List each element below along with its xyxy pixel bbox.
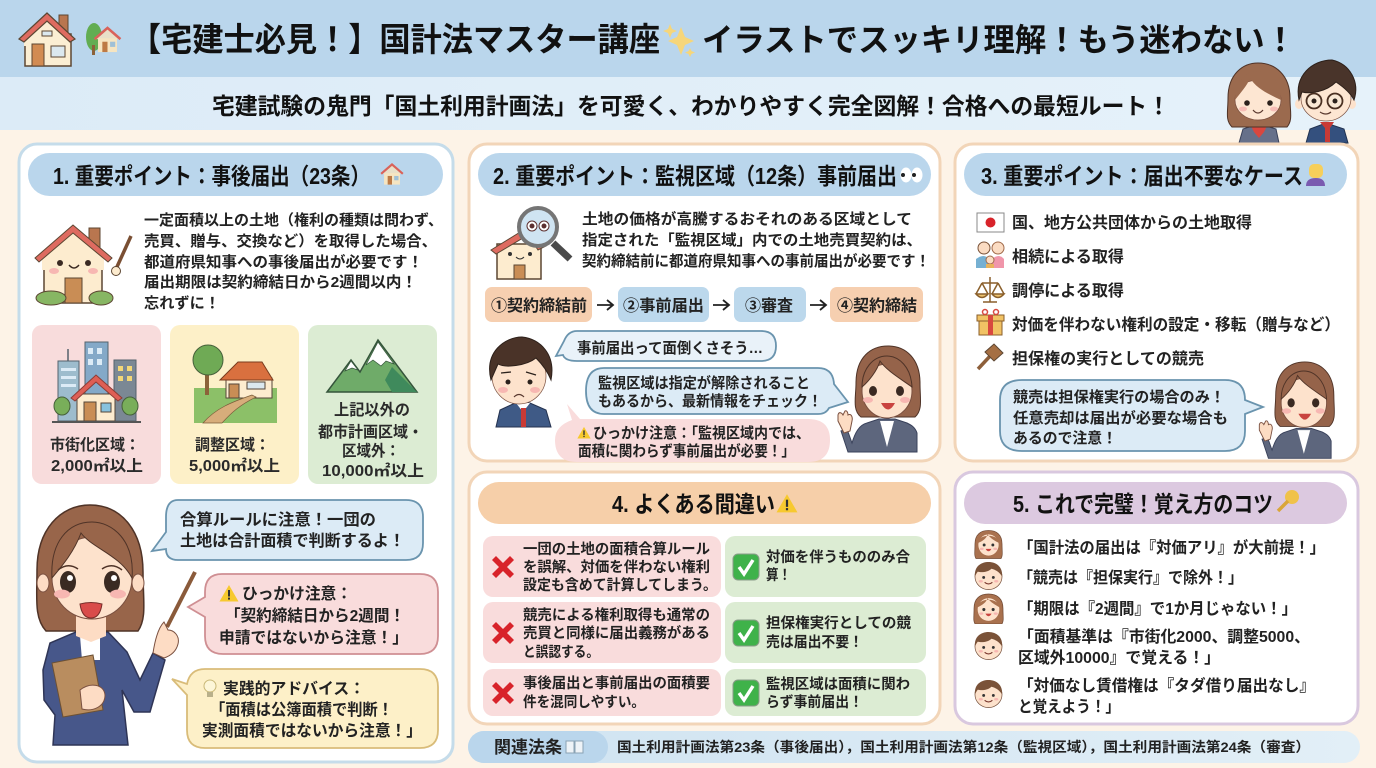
step 3: ③審査	[745, 297, 793, 315]
mistake row 3: 事後届出と事前届出の面積要	[523, 674, 710, 692]
heading 3: 3. 重要ポイント：届出不要なケース	[981, 163, 1303, 189]
character: teacher with pointer	[37, 505, 195, 745]
callout: 合算ルール: 合算ルールに注意！一団の	[180, 510, 376, 529]
callout: 実践的アドバイス	[172, 669, 438, 748]
text: intro	[144, 211, 443, 312]
icon: family	[976, 242, 1004, 268]
callout: 面倒くさそう	[556, 331, 776, 361]
callout: 監視区域 ひっかけ注意: ひっかけ注意：「監視区域内では、	[593, 424, 810, 442]
label: 都市計画区域・	[318, 422, 423, 441]
arrow 2	[713, 300, 729, 310]
tip 1	[975, 530, 1325, 558]
suit	[43, 632, 165, 745]
arrow 1	[597, 300, 613, 310]
tip 4: 「面積基準は『市街化2000、調整5000、	[1018, 627, 1310, 646]
list item: 対価なし	[977, 310, 1340, 335]
icon: city	[52, 342, 141, 423]
mistake row 1: を誤解、対価を伴わない権利	[523, 558, 710, 576]
heading 1: 1. 重要ポイント：事後届出（23条）	[53, 163, 370, 189]
card: 区域外	[308, 325, 437, 484]
step 1	[485, 287, 592, 322]
correction row 3	[725, 669, 926, 716]
heading 5: 5. これで完璧！覚え方のコツ	[1013, 491, 1273, 517]
icon: light bulb	[204, 680, 216, 697]
character: teacher	[1259, 362, 1334, 458]
label: 5,000㎡以上	[189, 456, 280, 475]
label: 調整区域：	[195, 436, 270, 454]
footer label	[468, 731, 608, 763]
tip 4: 区域外10000』で覚える！」	[1018, 648, 1220, 667]
hand	[153, 622, 178, 658]
correction row 1: 算！	[766, 566, 791, 584]
icon: countryside	[193, 345, 277, 423]
callout: ひっかけ注意: 「契約締結日から2週間！	[225, 606, 405, 625]
subtitle banner: 宅建試験の鬼門「国土利用計画法」を可愛く、わかりやすく完全図解！合格への最短ルート！	[212, 93, 1170, 119]
icon: sparkles	[663, 24, 695, 57]
step 4: ④契約締結	[837, 296, 917, 315]
callout: 競売 注意	[1000, 380, 1263, 451]
panel 3: 届出不要なケース	[955, 144, 1358, 461]
step 2	[618, 287, 709, 322]
callout: 最新情報: 監視区域は指定が解除されること	[598, 374, 810, 392]
tip 3	[974, 594, 1297, 624]
text: intro: 忘れずに！	[144, 295, 220, 312]
correction row 3: らず事前届出！	[766, 693, 863, 711]
character: worried boy	[490, 337, 552, 427]
text: intro	[582, 210, 930, 270]
heading 3	[964, 153, 1347, 196]
heading 2: 2. 重要ポイント：監視区域（12条）事前届出	[493, 163, 897, 189]
title banner	[0, 0, 1376, 77]
label: 10,000㎡以上	[322, 461, 424, 480]
list item: 国: 国、地方公共団体からの土地取得	[1012, 213, 1252, 232]
icon: mountains	[327, 340, 417, 392]
heading 4	[478, 482, 931, 524]
callout: 最新情報: もあるから、最新情報をチェック！	[598, 392, 822, 410]
icon: eyes	[900, 168, 922, 182]
characters: student girl	[1227, 63, 1291, 143]
label	[189, 436, 280, 475]
title text	[130, 21, 1296, 58]
list item: 競売	[978, 344, 1204, 369]
list item: 競売: 担保権の実行としての競売	[1012, 349, 1204, 368]
step 1: ①契約締結前	[491, 296, 587, 315]
heading 1	[28, 153, 443, 196]
icon: scales	[976, 277, 1004, 302]
mistake row 2	[483, 602, 721, 663]
flow chart	[485, 287, 923, 322]
footer text: 国土利用計画法第23条（事後届出），国土利用計画法第12条（監視区域），国土利用計画法第24条（審査）	[617, 739, 1310, 755]
tip 5: 「対価なし賃借権は『タダ借り届出なし』	[1018, 676, 1315, 695]
callout: 実践的アドバイス: 「面積は公簿面積で判断！	[210, 701, 393, 719]
list item: 調停: 調停による取得	[1012, 282, 1124, 300]
mistake row 1	[483, 536, 721, 597]
callout: 面倒くさそう: 事前届出って面倒くさそう…	[577, 339, 763, 357]
callout: 競売 注意: あるので注意！	[1013, 429, 1117, 447]
label: 2,000㎡以上	[51, 456, 143, 475]
heading 5	[964, 482, 1347, 524]
list item: 対価なし: 対価を伴わない権利の設定・移転（贈与など）	[1012, 315, 1340, 334]
icon: small house with tree	[86, 23, 120, 55]
callout: ひっかけ注意: ひっかけ注意：	[242, 585, 352, 603]
step 2: ②事前届出	[623, 296, 704, 315]
icon: key	[1278, 490, 1299, 511]
callout: 合算ルール	[152, 500, 423, 560]
panel 2: 監視区域	[469, 144, 940, 462]
folder	[52, 655, 103, 717]
tip 5	[975, 676, 1315, 716]
correction row 3: 監視区域は面積に関わ	[766, 675, 910, 693]
mistake row 2: と誤認する。	[523, 644, 599, 661]
tip 2: 「競売は『担保実行』で除外！」	[1018, 568, 1243, 587]
callout: 競売 注意: 任意売却は届出が必要な場合も	[1013, 409, 1228, 427]
tip 2	[975, 562, 1243, 590]
callout: ひっかけ注意	[188, 574, 438, 654]
correction row 2	[725, 602, 926, 663]
heading 4: 4. よくある間違い	[612, 491, 775, 517]
label	[50, 435, 143, 475]
callout: 最新情報	[586, 368, 848, 414]
title text: 【宅建士必見！】国計法マスター講座	[130, 21, 660, 58]
mistake row 3: 件を混同しやすい。	[523, 694, 645, 711]
text: intro: 都道府県知事への事後届出が必要です！	[144, 253, 423, 271]
icon: book	[566, 741, 583, 753]
tip 1: 「国計法の届出は『対価アリ』が大前提！」	[1018, 538, 1325, 557]
step 4	[830, 287, 923, 322]
mistake row 1: 設定も含めて計算してしまう。	[523, 576, 717, 594]
icon: person	[1306, 164, 1325, 186]
icon: large house	[19, 13, 75, 66]
label	[318, 400, 424, 480]
card: 市街化区域	[32, 325, 161, 484]
callout: 実践的アドバイス: 実測面積ではないから注意！」	[202, 722, 422, 740]
correction row 1: 対価を伴うもののみ合	[766, 548, 910, 566]
callout: 監視区域 ひっかけ注意	[555, 404, 830, 462]
panel 1: 事後届出	[19, 144, 453, 762]
callout: ひっかけ注意: 申請ではないから注意！」	[219, 629, 408, 647]
step 3	[734, 287, 806, 322]
panel 5: 覚え方のコツ	[955, 472, 1358, 724]
callout: 実践的アドバイス: 実践的アドバイス：	[223, 680, 365, 698]
icon: house with pointer	[35, 225, 131, 305]
icon: gift	[977, 310, 1004, 335]
label: 市街化区域：	[50, 435, 140, 454]
mistake row 2: 競売による権利取得も通常の	[523, 606, 710, 624]
card: 調整区域	[170, 325, 299, 484]
callout: 監視区域 ひっかけ注意: 面積に関わらず事前届出が必要！」	[578, 442, 795, 460]
tip 4	[975, 627, 1310, 667]
characters: student boy	[1295, 60, 1356, 143]
tip 3: 「期限は『2週間』で1か月じゃない！」	[1018, 600, 1297, 618]
mistake row 1: 一団の土地の面積合算ルール	[523, 540, 710, 558]
tip 5: と覚えよう！」	[1018, 697, 1120, 716]
callout: 合算ルール: 土地は合計面積で判断するよ！	[180, 532, 405, 550]
correction row 1	[725, 536, 926, 597]
label: 区域外：	[342, 441, 400, 460]
text: intro: 売買、贈与、交換など）を取得した場合、	[144, 232, 437, 250]
icon: gavel	[978, 344, 1003, 369]
title text: イラストでスッキリ理解！もう迷わない！	[702, 22, 1296, 58]
list item: 相続	[976, 242, 1124, 268]
fringe	[52, 522, 132, 578]
heading 2	[478, 153, 931, 196]
character: teacher	[838, 346, 921, 452]
footer: related articles	[468, 731, 1360, 763]
footer label: 関連法条	[494, 737, 562, 757]
pointer	[167, 572, 195, 627]
text: intro: 土地の価格が高騰するおそれのある区域として	[582, 210, 912, 228]
arrow 3	[810, 300, 826, 310]
panel 4: よくある間違い	[469, 472, 940, 724]
text: intro: 届出期限は契約締結日から2週間以内！	[144, 273, 417, 291]
text: intro: 一定面積以上の土地（権利の種類は問わず、	[144, 211, 443, 229]
correction row 2: 売は届出不要！	[766, 634, 863, 651]
subtitle banner	[0, 77, 1376, 130]
icon: house with magnifier	[491, 208, 570, 279]
text: intro: 契約締結前に都道府県知事への事前届出が必要です！	[582, 252, 930, 270]
icon: flag	[977, 213, 1004, 232]
mistake row 3	[483, 669, 721, 716]
callout: 競売 注意: 競売は担保権実行の場合のみ！	[1013, 388, 1225, 406]
list item: 調停	[976, 277, 1124, 302]
label: 上記以外の	[334, 400, 410, 419]
text: intro: 指定された「監視区域」内での土地売買契約は、	[582, 231, 922, 249]
mistake row 2: 売買と同様に届出義務がある	[523, 624, 710, 642]
hair	[37, 505, 144, 631]
list item: 相続: 相続による取得	[1012, 248, 1124, 266]
correction row 2: 担保権実行としての競	[766, 614, 911, 632]
